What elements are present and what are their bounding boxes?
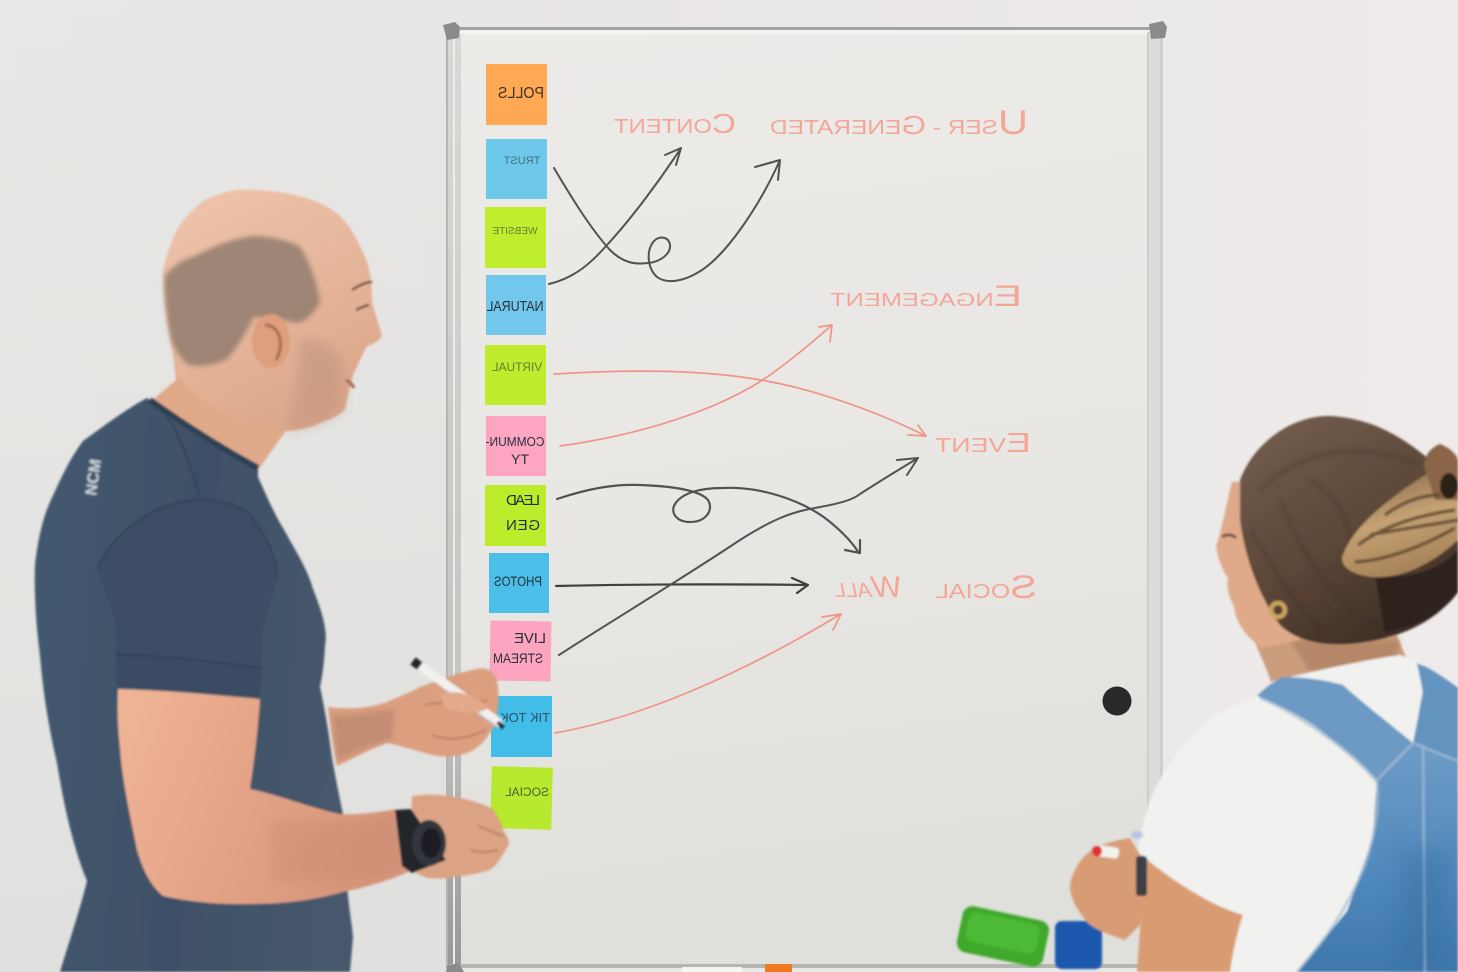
white marker pen xyxy=(413,661,503,728)
heading: event: EVENT xyxy=(935,427,1031,458)
eye xyxy=(1222,535,1236,538)
fingers shading xyxy=(425,700,488,739)
board frame bottom rail xyxy=(450,964,1158,968)
arrow: live stream to event xyxy=(559,458,918,655)
red headings, mirrored handwriting xyxy=(614,104,1037,605)
board surface xyxy=(455,30,1155,968)
painted fingernail xyxy=(1131,831,1143,839)
sleeve hem xyxy=(115,652,262,697)
shoulder seams xyxy=(97,405,277,668)
inner ear shading xyxy=(265,325,280,360)
hand-drawn arrows xyxy=(549,148,926,733)
note: polls: POLLS xyxy=(498,85,544,102)
heading: user-generated: USER - GENERATED xyxy=(770,104,1028,142)
pointing arm and hand xyxy=(328,669,499,766)
denim strap left xyxy=(1257,677,1413,780)
shirt shoulder shadow xyxy=(97,500,277,697)
shirt collar seam xyxy=(150,400,258,468)
hair xyxy=(1240,416,1458,644)
mouth xyxy=(346,380,354,388)
note: live stream: STREAM xyxy=(493,650,543,666)
white t-shirt xyxy=(1138,655,1423,972)
arrow: trust to user-generated content with loop xyxy=(554,160,780,281)
bun highlights xyxy=(1342,470,1458,577)
note: lead gen xyxy=(485,485,546,546)
board frame top rail xyxy=(450,27,1158,30)
denim seam stitching xyxy=(1260,698,1458,972)
board frame left rail xyxy=(447,32,461,968)
note: virtual xyxy=(485,345,546,405)
denim overall body xyxy=(1297,743,1458,972)
note: tik tok xyxy=(491,696,552,757)
bun dark centre xyxy=(1440,473,1458,499)
neck shadow xyxy=(1290,640,1400,672)
ear xyxy=(252,314,290,368)
corner bracket top right xyxy=(1149,21,1167,39)
note: lead gen: LEAD xyxy=(506,492,540,509)
gold earring xyxy=(1271,603,1285,617)
note: polls xyxy=(486,64,547,125)
bun hair strands xyxy=(1355,495,1458,562)
red-capped marker xyxy=(1092,844,1120,859)
woman in denim overalls xyxy=(955,416,1458,972)
note: trust xyxy=(486,139,547,199)
woman's arm xyxy=(1137,860,1243,972)
corner bracket bottom left xyxy=(446,963,464,972)
round black magnet xyxy=(1102,686,1132,716)
heading: content: CONTENT xyxy=(614,108,736,139)
note: virtual: VIRTUAL xyxy=(491,360,542,374)
note: community xyxy=(486,416,546,476)
note: photos xyxy=(489,553,549,613)
note: natural xyxy=(486,275,546,335)
arrow: photos to social wall xyxy=(556,578,808,593)
note: social: SOCIAL xyxy=(505,785,549,799)
note: website xyxy=(485,207,546,268)
note: community: COMMUN- xyxy=(486,435,544,449)
fist knuckle lines xyxy=(470,826,503,852)
dark marker in hand xyxy=(1136,856,1147,896)
neck skin xyxy=(1250,630,1410,690)
dark under-bun hair xyxy=(1375,550,1458,632)
note: community: TY xyxy=(510,451,529,467)
note: natural: NATURAL xyxy=(486,298,544,315)
beard shadow xyxy=(288,339,345,430)
note: live stream: LIVE xyxy=(514,630,546,647)
denim strap right xyxy=(1413,663,1458,761)
marker stub on tray xyxy=(765,964,792,972)
forearm hair shading xyxy=(270,818,405,882)
eye and brow xyxy=(352,282,372,310)
fist xyxy=(410,795,509,879)
shirt logo text: NCM xyxy=(83,458,105,497)
note: live stream xyxy=(489,620,552,682)
arm hair shading on pointing arm xyxy=(332,708,395,762)
wristwatch xyxy=(395,809,446,873)
green eraser xyxy=(955,904,1051,969)
head xyxy=(163,190,382,431)
whiteboard xyxy=(443,21,1167,972)
short hair patch xyxy=(165,236,320,366)
note: tik tok: TIK TOK xyxy=(500,710,550,725)
note: social xyxy=(490,766,553,830)
note: lead gen: GEN xyxy=(506,517,540,534)
denim darker shade xyxy=(1395,850,1450,972)
arrow: tik tok to social wall xyxy=(555,614,841,733)
arrow: community to engagement xyxy=(560,325,832,446)
note: website: WEBSITE xyxy=(492,226,538,237)
arrow: lead gen to social wall with loop xyxy=(557,485,860,553)
bun top tuft xyxy=(1424,444,1458,500)
note: trust: TRUST xyxy=(503,155,540,167)
upper arm and forearm xyxy=(118,689,411,904)
heading: wall: WALL xyxy=(834,571,902,604)
hair strands xyxy=(1250,451,1420,630)
sticky notes column xyxy=(485,64,553,830)
board frame right rail xyxy=(1148,32,1163,968)
face xyxy=(1216,480,1300,648)
woman's hand xyxy=(1070,838,1147,940)
neck xyxy=(150,340,320,470)
heading: engagement: ENGAGEMENT xyxy=(830,280,1022,313)
thumb over pen xyxy=(440,692,488,713)
white marker on tray xyxy=(682,967,742,972)
arrow: virtual to event xyxy=(554,371,926,436)
note: photos: PHOTOS xyxy=(494,573,542,589)
man in navy t-shirt xyxy=(35,190,509,972)
blue eraser xyxy=(1055,921,1102,969)
corner bracket top left xyxy=(443,22,460,40)
arrow: natural to content xyxy=(549,148,681,284)
heading: social: SOCIAL xyxy=(935,569,1037,605)
t-shirt body xyxy=(35,398,353,972)
